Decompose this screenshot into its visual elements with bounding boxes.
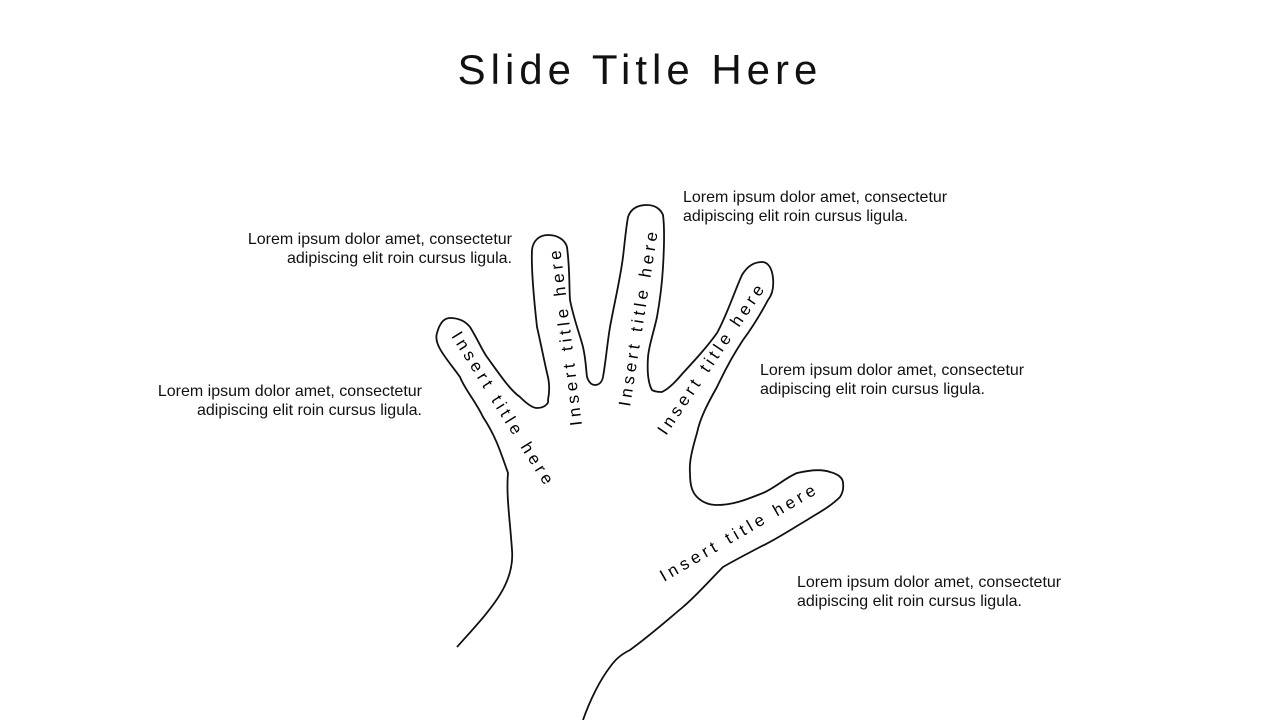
hand outline: [436, 205, 843, 720]
title: Slide Title Here: [458, 46, 822, 93]
label: index finger: Insert title here: [654, 278, 770, 438]
text block: index finger: [760, 362, 1024, 398]
text block: middle finger: adipiscing elit roin cursus ligula.: [683, 208, 908, 225]
text block: middle finger: [683, 189, 947, 225]
label: middle finger: Insert title here: [615, 226, 662, 408]
text block: index finger: Lorem ipsum dolor amet, consectetur: [760, 362, 1024, 379]
text block: thumb: [797, 574, 1061, 610]
text block: thumb: Lorem ipsum dolor amet, consectetur: [797, 574, 1061, 591]
label: ring finger: Insert title here: [545, 245, 586, 427]
text block: ring finger: Lorem ipsum dolor amet, consectetur: [248, 231, 512, 248]
text block: pinky: Lorem ipsum dolor amet, consectetur: [158, 383, 422, 400]
text block: pinky: [158, 383, 422, 419]
label: pinky: Insert title here: [448, 328, 559, 491]
text block: index finger: adipiscing elit roin cursus ligula.: [760, 381, 985, 398]
label: thumb: Insert title here: [656, 479, 822, 585]
text block: pinky: adipiscing elit roin cursus ligula.: [197, 402, 422, 419]
text block: ring finger: adipiscing elit roin cursus ligula.: [287, 250, 512, 267]
text block: ring finger: [248, 231, 512, 267]
text block: thumb: adipiscing elit roin cursus ligula.: [797, 593, 1022, 610]
text block: middle finger: Lorem ipsum dolor amet, consectetur: [683, 189, 947, 206]
